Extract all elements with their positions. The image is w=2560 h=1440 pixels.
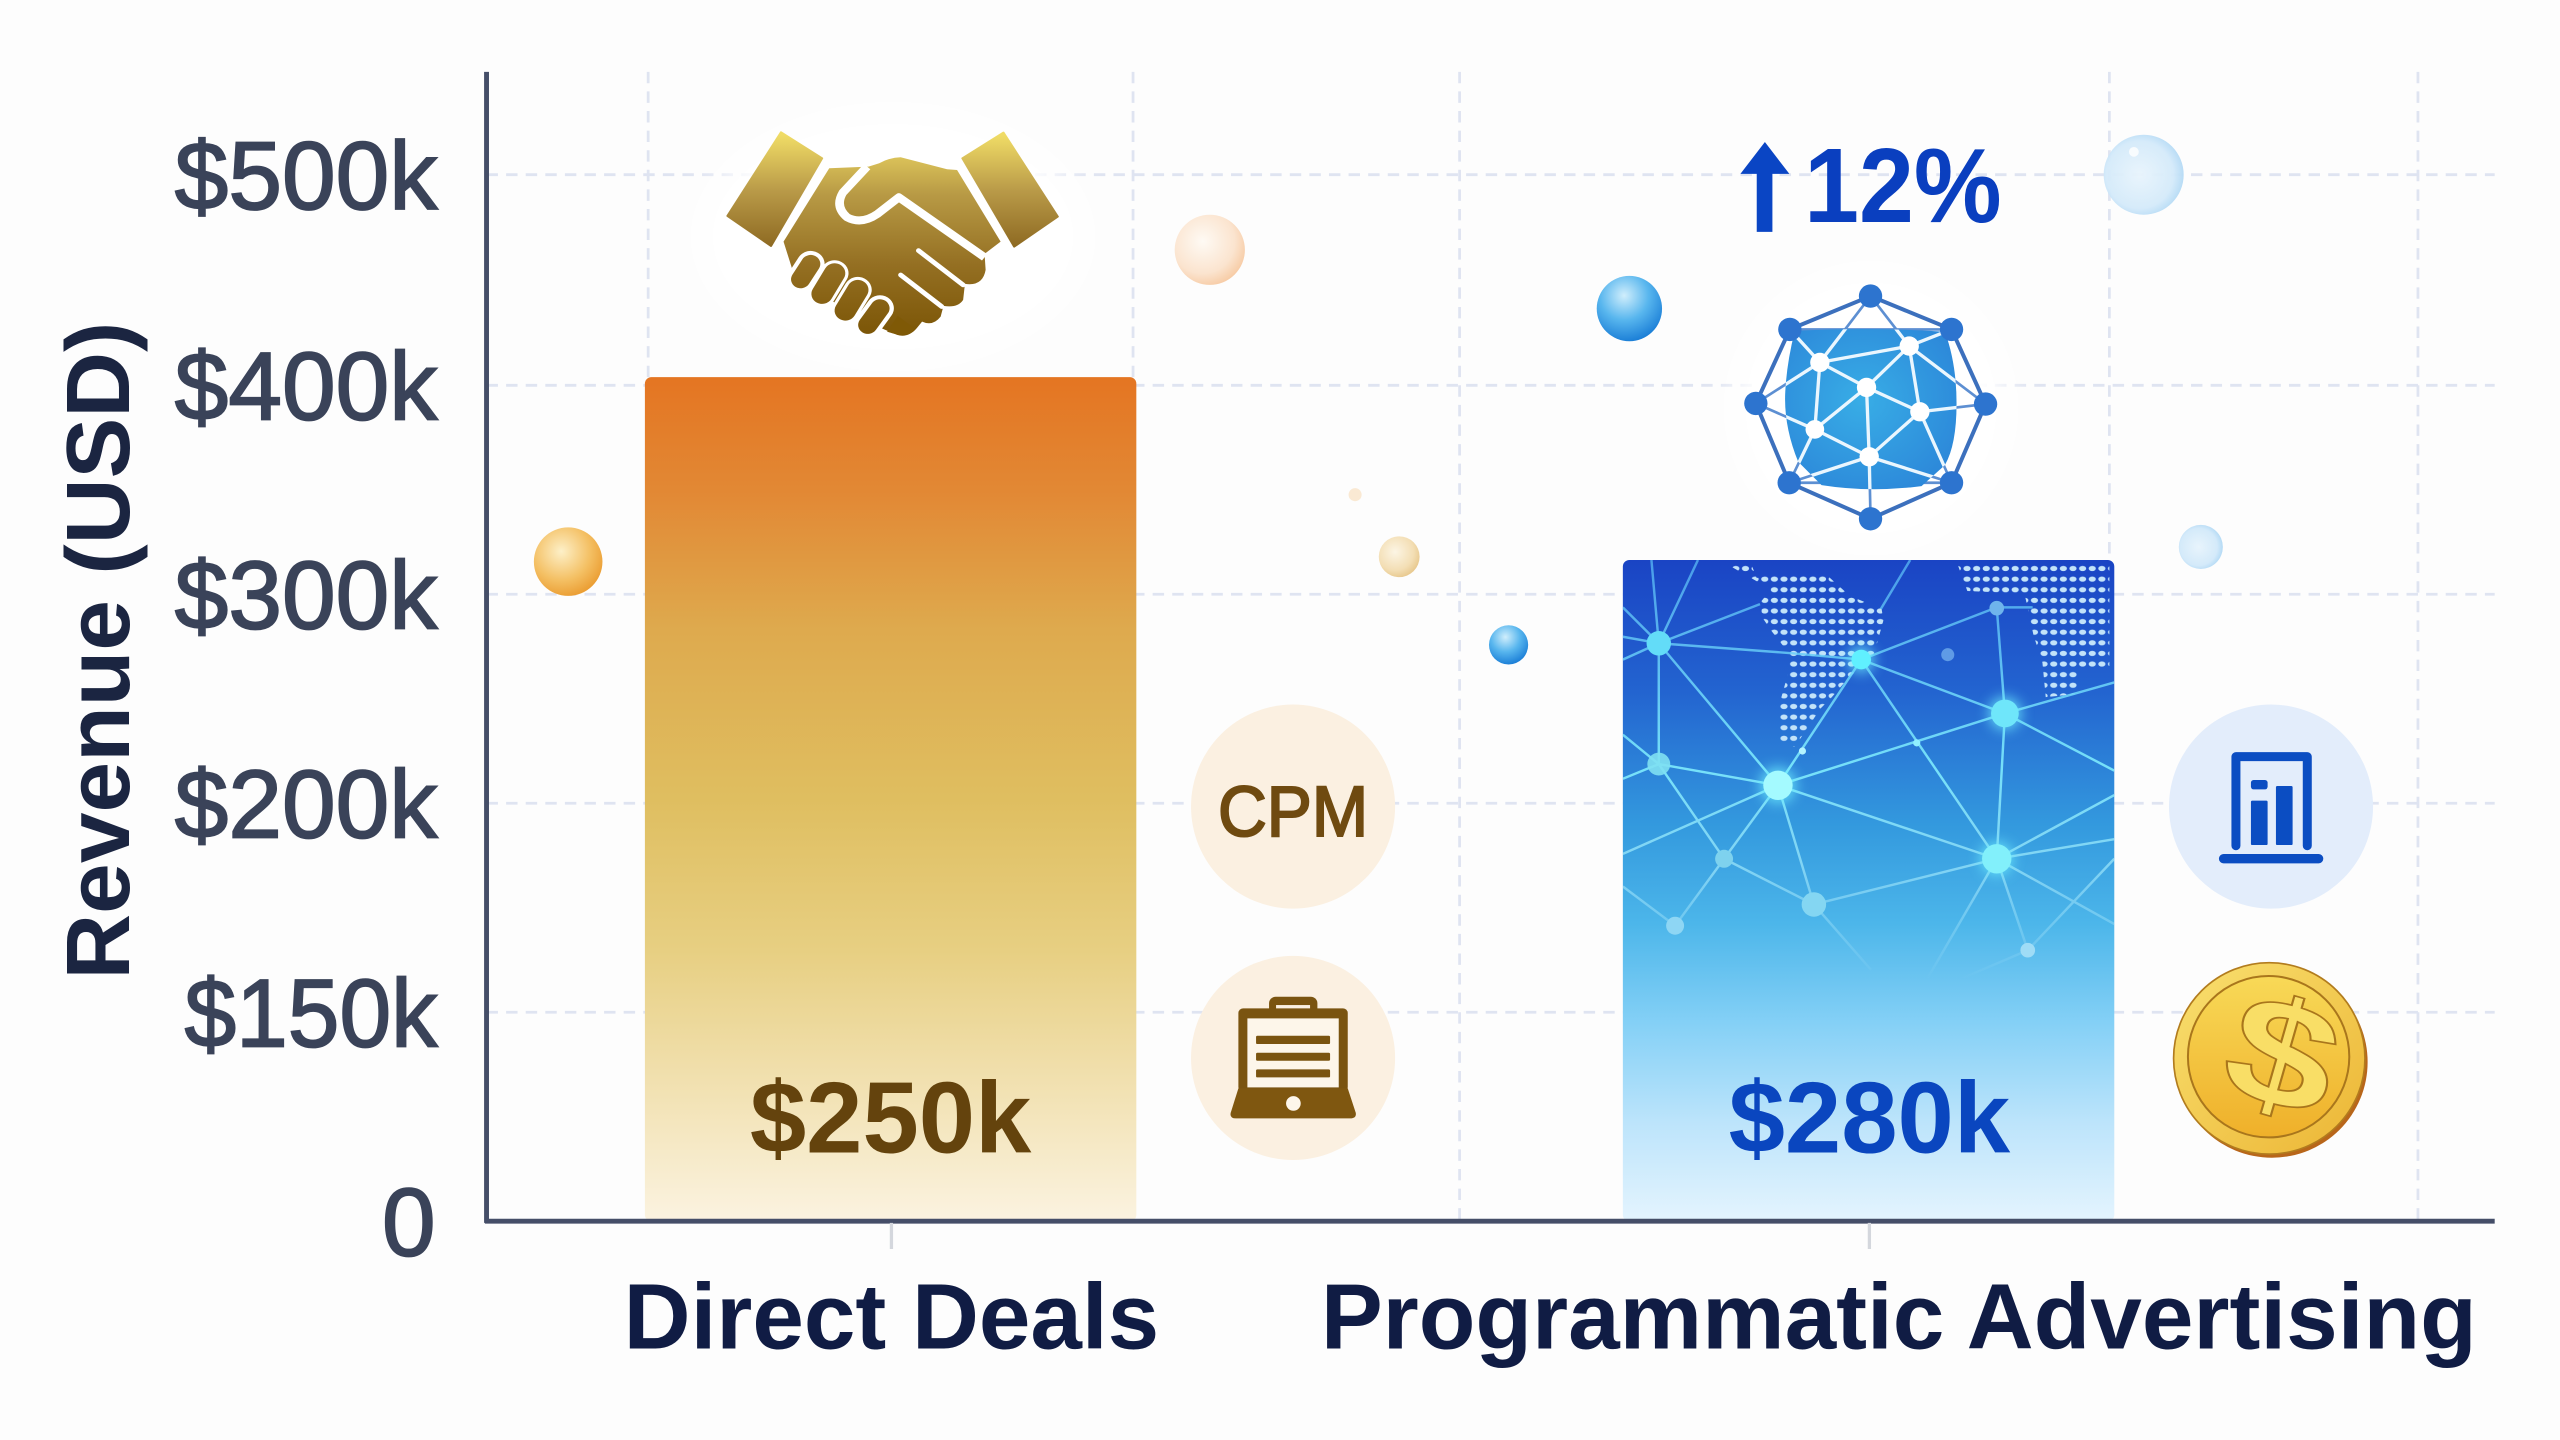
y-axis tick labels: $500k bbox=[175, 123, 438, 230]
y-axis tick labels bbox=[175, 123, 438, 1277]
y-axis tick labels: $200k bbox=[175, 752, 438, 859]
network and world map overlay bbox=[1623, 560, 2114, 983]
bubbles bbox=[534, 135, 2223, 664]
icon: handshake bbox=[700, 113, 1086, 361]
icon: network polyhedron bbox=[1734, 271, 2008, 545]
y-axis tick labels: $150k bbox=[184, 961, 438, 1068]
y-axis title: Revenue (USD) bbox=[49, 322, 149, 980]
value label: $280k: $280k bbox=[1729, 1062, 2011, 1175]
icon: gold dollar coin: $ bbox=[2207, 959, 2358, 1150]
y-axis tick labels: $400k bbox=[175, 334, 438, 441]
icon: bar chart badge bbox=[2169, 704, 2373, 909]
y-axis tick labels: $300k bbox=[175, 543, 438, 650]
icon: CPM badge bbox=[1191, 704, 1395, 909]
icon: CPM badge: CPM bbox=[1218, 772, 1368, 852]
value label: $250k: $250k bbox=[750, 1062, 1032, 1175]
axes bbox=[485, 72, 2495, 1249]
arrow and 12% growth label: 12% bbox=[1804, 127, 2002, 245]
bar: Programmatic Advertising bbox=[1623, 560, 2114, 1221]
bar: Direct Deals bbox=[645, 377, 1136, 1221]
category label: Programmatic Advertising: Programmatic Advertising bbox=[1321, 1265, 2477, 1369]
icon: laptop with report badge bbox=[1191, 956, 1395, 1160]
category label: Direct Deals: Direct Deals bbox=[624, 1265, 1159, 1369]
y-axis tick labels: 0 bbox=[382, 1170, 436, 1277]
